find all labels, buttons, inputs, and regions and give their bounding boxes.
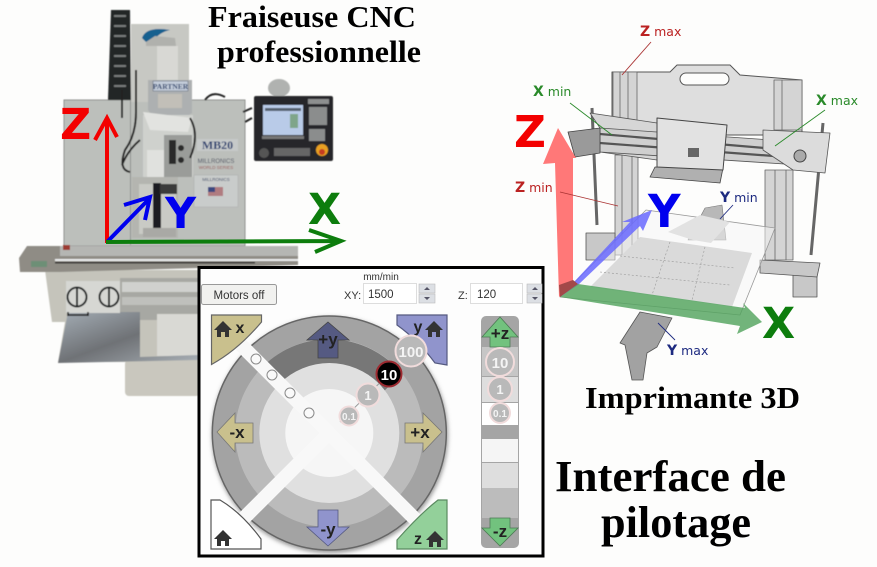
step: 1: 1 xyxy=(364,388,372,403)
label: Y max: Y max xyxy=(666,343,708,359)
arrow: -x xyxy=(217,413,253,452)
label: X max xyxy=(775,93,858,146)
label: mm/min: mm/min xyxy=(363,272,399,283)
button: home z xyxy=(397,500,447,549)
axis label: Z: Z xyxy=(514,107,546,158)
printer back plate xyxy=(612,65,802,135)
machine badges: MILLRONICS xyxy=(198,159,234,165)
machine saddle and body xyxy=(45,270,200,396)
print bed xyxy=(560,210,775,315)
axes origin xyxy=(559,280,578,297)
button: Motors off xyxy=(202,284,276,304)
panel frame xyxy=(199,268,543,556)
arrow: -z: -z xyxy=(493,522,507,541)
button: home z: z xyxy=(414,531,422,548)
title: Fraiseuse CNC professionnelle: Fraiseuse CNC xyxy=(208,0,416,34)
title: Interface de pilotage: Interface de xyxy=(555,452,786,501)
arrow: +z xyxy=(482,317,518,347)
axis arrow: X translucent xyxy=(560,284,762,334)
axis arrow: Y translucent xyxy=(560,210,652,297)
perforations xyxy=(251,354,314,418)
printer uprights xyxy=(613,72,802,260)
X carriage xyxy=(650,118,727,183)
label: Z max xyxy=(622,24,681,75)
cable chain xyxy=(108,10,131,100)
axis arrow: Y xyxy=(107,197,150,242)
control pendant xyxy=(254,79,333,161)
Z jog column xyxy=(481,316,519,548)
field: Z feed rate: 120 xyxy=(477,289,496,301)
step: 1: 1 xyxy=(496,382,504,397)
XY speed steps xyxy=(340,336,426,426)
axis label: Z: Z xyxy=(60,100,91,150)
illustration: 3D printer xyxy=(543,65,830,380)
button: home y xyxy=(397,315,447,365)
printer axis labels xyxy=(514,107,795,349)
arrow: +y xyxy=(307,322,349,358)
machine back panel xyxy=(64,100,245,246)
axis arrow: X xyxy=(106,230,341,252)
machine table xyxy=(19,245,298,272)
printer base and motors xyxy=(586,233,820,297)
title: Imprimante 3D: Imprimante 3D xyxy=(585,380,800,415)
spindle housing xyxy=(131,24,189,102)
arrow: +z: +z xyxy=(491,324,509,343)
wheel shadow xyxy=(212,317,448,553)
axis label: X: X xyxy=(762,299,795,349)
label: Y max xyxy=(658,323,708,359)
axis label: Y: Y xyxy=(164,189,197,239)
label: X max: X max xyxy=(816,93,858,109)
column body xyxy=(481,316,519,548)
threaded rods xyxy=(592,108,823,255)
machine badges: WORLD SERIES xyxy=(199,165,233,170)
field: XY feed rate: 1500 xyxy=(368,289,394,301)
label: X min xyxy=(533,84,612,135)
arrow: +x xyxy=(405,413,442,452)
label: X min: X min xyxy=(533,84,571,100)
arrow: +y: +y xyxy=(318,330,338,349)
arrow: -x: -x xyxy=(229,423,245,442)
field: Z feed rate: Z: xyxy=(458,290,468,302)
machine badges: MB20 xyxy=(202,138,233,152)
illustration: CNC milling machine xyxy=(19,10,333,396)
jog rings xyxy=(212,316,446,550)
title: Interface de pilotage xyxy=(555,452,786,547)
thin speed track xyxy=(340,358,405,422)
field: XY feed rate: XY: xyxy=(344,290,361,302)
Y rail and foot xyxy=(620,312,672,380)
handwheels xyxy=(66,281,120,316)
label: Y min xyxy=(719,190,758,219)
axis label: X: X xyxy=(308,185,341,235)
machine head: PARTNER xyxy=(153,82,189,91)
title: Fraiseuse CNC professionnelle xyxy=(208,0,421,69)
arrow: -y: -y xyxy=(320,520,336,539)
machine head xyxy=(143,80,193,177)
step: 0.1: 0.1 xyxy=(342,412,356,423)
field: XY feed rate xyxy=(344,284,435,304)
arrow: +x: +x xyxy=(410,423,430,442)
button: Motors off: Motors off xyxy=(214,290,265,302)
step: 100: 100 xyxy=(398,344,424,361)
label: Y min: Y min xyxy=(719,190,758,206)
button: home x xyxy=(212,315,262,364)
step: 10: 10 xyxy=(492,355,508,372)
machine badges xyxy=(194,138,238,207)
column segments xyxy=(482,347,518,518)
title: Fraiseuse CNC professionnelle: professionnelle xyxy=(217,34,421,69)
label: Z max: Z max xyxy=(640,24,681,40)
field: Z feed rate xyxy=(458,284,542,304)
button: home x: x xyxy=(236,320,245,337)
label: Z min: Z min xyxy=(515,180,553,196)
milling machine axes xyxy=(60,100,341,252)
Z speed steps xyxy=(486,348,514,423)
axis arrow: Z xyxy=(95,118,117,243)
machine badges: MILLRONICS xyxy=(202,177,230,182)
diagonal bands xyxy=(238,344,420,524)
plate handle hole xyxy=(680,73,729,85)
step: 10 active: 10 xyxy=(381,367,397,384)
XY jog wheel xyxy=(212,316,448,553)
title: Interface de pilotage: pilotage xyxy=(601,498,751,547)
button: home y: y xyxy=(414,319,423,336)
arrow: -z xyxy=(482,518,518,546)
chip tray xyxy=(58,312,198,363)
machine ram and column xyxy=(130,100,178,245)
hoses xyxy=(122,70,252,172)
button: home all xyxy=(211,500,261,549)
label: Z min xyxy=(515,180,618,206)
axis label: Y: Y xyxy=(647,185,682,238)
printer callouts xyxy=(515,24,858,359)
panel: control interface xyxy=(199,268,543,556)
X gantry xyxy=(568,113,830,173)
Y rear rail xyxy=(688,205,726,240)
arrow: -y xyxy=(307,510,349,546)
axis arrow: Z translucent xyxy=(543,128,576,297)
step: 0.1: 0.1 xyxy=(493,409,507,420)
